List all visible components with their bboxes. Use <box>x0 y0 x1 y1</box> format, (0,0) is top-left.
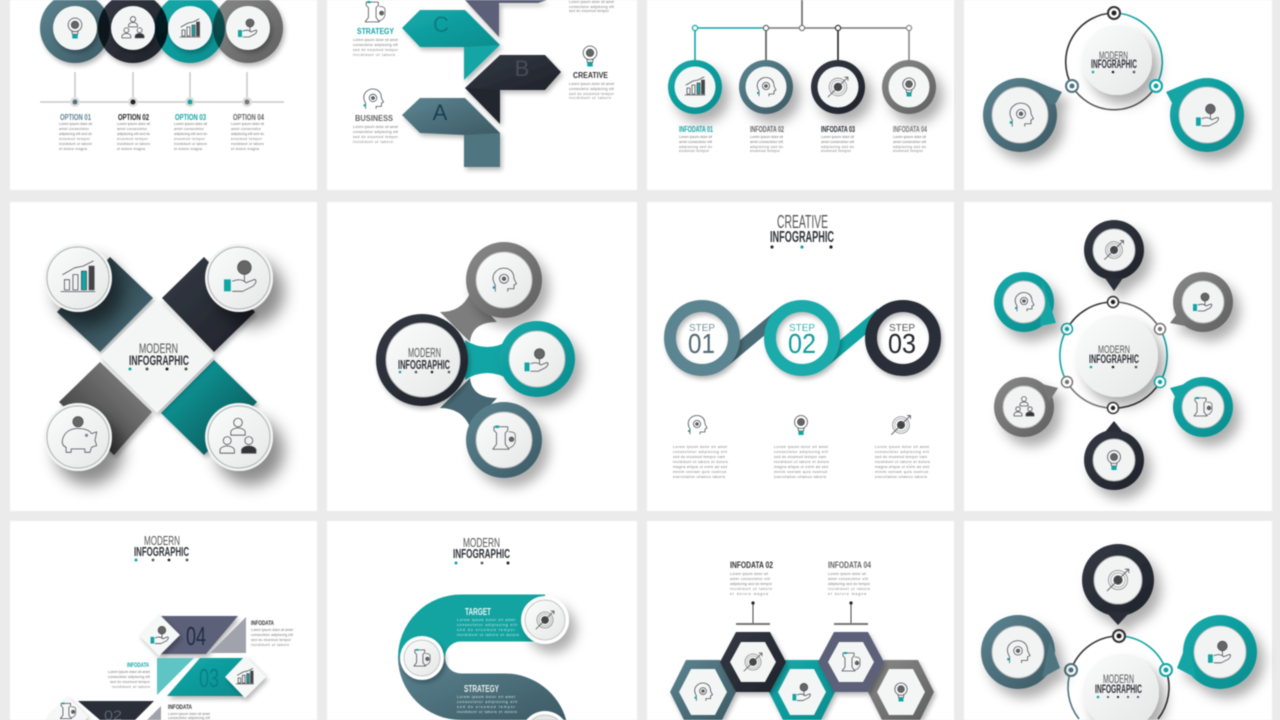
step 03 ring <box>822 306 935 370</box>
hub ring <box>1060 302 1167 408</box>
infodata descriptions: Lorem ipsum dolor sit <box>750 135 783 139</box>
hub title: MODERN <box>1103 672 1134 686</box>
panel: hub with two bubbles <box>964 0 1272 190</box>
steps title <box>770 212 834 246</box>
infodata descriptions: adipiscing sed do <box>750 145 783 149</box>
step 03 text: INFODATA <box>127 663 149 669</box>
bubble: top target <box>1082 544 1154 625</box>
arrow D <box>465 0 547 37</box>
bubble: left slate <box>983 78 1062 152</box>
option descriptions: et dolore magna <box>59 147 87 151</box>
infodata 04 text: incididunt ut labore <box>828 587 870 591</box>
target text: consectetur adipiscing elit <box>457 623 517 627</box>
option descriptions: et dolore magna <box>231 147 259 151</box>
tree connectors <box>695 0 909 60</box>
infodata labels: INFODATA 04 <box>893 125 927 134</box>
arrow A: A <box>433 100 448 125</box>
infodata descriptions: eiusmod tempor <box>821 149 852 153</box>
panel: hub with three bubbles <box>964 521 1272 720</box>
infodata descriptions: adipiscing sed do <box>821 145 854 149</box>
step 04 text: incididunt ut labore <box>251 643 289 647</box>
title <box>453 535 510 561</box>
top text: consectetur adipiscing elit <box>569 5 614 9</box>
panel: X diagram <box>10 202 317 511</box>
hub title <box>1089 344 1139 366</box>
step 02 text: minim veniam quis nostrud <box>774 470 827 474</box>
step 03 text: incididunt ut labore et dolore <box>875 460 930 464</box>
hub title dots <box>1097 696 1139 698</box>
strategy text: consectetur adipiscing elit <box>353 43 398 47</box>
hub ring <box>1068 636 1169 719</box>
option labels <box>60 113 264 122</box>
step 02 <box>47 696 161 720</box>
infodata labels: INFODATA 01 <box>679 125 713 134</box>
bubble: upper right hand <box>1170 272 1233 332</box>
steps title: CREATIVE <box>777 212 828 232</box>
infodata labels: INFODATA 03 <box>821 125 855 134</box>
hub disc <box>1076 315 1158 397</box>
infodata descriptions <box>679 135 926 153</box>
hub title dots <box>1090 366 1137 368</box>
step 04 text: Lorem ipsum dolor sit amet <box>251 628 293 632</box>
target label: TARGET <box>465 607 491 618</box>
infodata 04 label: INFODATA 04 <box>828 560 872 571</box>
arrow A <box>402 98 500 167</box>
bubble: right teal <box>1166 78 1244 152</box>
step 01 text: sed do eiusmod tempor nam <box>673 455 725 459</box>
business text <box>353 125 399 144</box>
option descriptions: Lorem ipsum dolor sit <box>59 122 92 126</box>
step 03 text: sed do eiusmod tempor nam <box>875 455 927 459</box>
hub title <box>1091 50 1137 71</box>
step 04 text: INFODATA <box>251 621 275 627</box>
option descriptions: amet consectetur <box>59 127 90 131</box>
infodata 04 text: amet consectetur elit <box>828 577 868 581</box>
title dots <box>454 562 510 564</box>
option labels: OPTION 03 <box>175 113 206 122</box>
ring nodes <box>1066 7 1162 92</box>
main title: INFOGRAPHIC <box>398 357 450 372</box>
option descriptions: adipiscing elit sed do <box>117 132 150 136</box>
option descriptions: eiusmod tempor <box>174 137 206 141</box>
infodata descriptions: adipiscing sed do <box>679 145 712 149</box>
bubble: lower left people <box>994 377 1058 437</box>
hub title: INFOGRAPHIC <box>1091 57 1137 71</box>
target text: Lorem ipsum dolor sit amet <box>457 618 515 622</box>
infodata descriptions: adipiscing sed do <box>893 145 926 149</box>
step 02 label: 02 <box>788 328 816 359</box>
hexagon dark <box>720 632 786 692</box>
step 03 text: Lorem ipsum dolor sit amet <box>108 670 150 674</box>
icon: business head <box>364 89 384 108</box>
option labels: OPTION 04 <box>233 113 264 122</box>
option descriptions: eiusmod tempor <box>231 137 263 141</box>
step 02 ring <box>770 306 834 370</box>
centre diamond <box>100 300 214 413</box>
infodata descriptions: eiusmod tempor <box>750 149 781 153</box>
infodata 04 text: et dolore magna <box>828 592 866 596</box>
disc: target <box>521 596 569 644</box>
creative label: CREATIVE <box>573 71 609 80</box>
infodata 04 text: Lorem ipsum dolor sit <box>828 572 866 576</box>
option descriptions: et dolore magna <box>117 147 145 151</box>
hub title: INFOGRAPHIC <box>1095 682 1142 696</box>
target text: sed do eiusmod tempor <box>457 628 516 632</box>
creative text: consectetur adipiscing elit <box>569 87 614 91</box>
option descriptions: Lorem ipsum dolor sit <box>231 122 264 126</box>
panel: folded arrows <box>327 0 637 190</box>
option descriptions: eiusmod tempor <box>59 137 91 141</box>
hub disc <box>1083 654 1159 720</box>
bubble: lower right tower <box>1170 377 1233 437</box>
pin 04 <box>834 601 868 624</box>
connectors <box>440 293 510 427</box>
business text: consectetur adipiscing elit <box>353 130 398 134</box>
hexagon gray <box>868 660 934 720</box>
step icons <box>688 416 910 435</box>
option discs <box>53 6 270 50</box>
step 04 text <box>251 621 293 647</box>
strategy text: sed do eiusmod tempor <box>457 705 516 709</box>
infodata 04 text: adipiscing sed do tempor <box>828 582 871 586</box>
title: INFOGRAPHIC <box>134 545 189 559</box>
hub title dots <box>1092 71 1135 73</box>
infodata descriptions: Lorem ipsum dolor sit <box>679 135 712 139</box>
step 01 text <box>673 445 728 479</box>
option descriptions <box>59 122 264 151</box>
panel: hexagon chain <box>647 521 954 720</box>
panel: S path <box>327 521 637 720</box>
satellite icons <box>493 268 548 449</box>
business text: sed do eiusmod tempor <box>353 135 399 139</box>
strategy text <box>457 695 517 714</box>
step 03 text <box>108 663 151 689</box>
option descriptions: incididunt ut labore <box>117 142 150 146</box>
arrow B: B <box>515 56 529 81</box>
step 02 text: sed do eiusmod tempor nam <box>774 455 826 459</box>
step 03 text: sed do eiusmod tempor <box>110 680 151 684</box>
steps title: INFOGRAPHIC <box>770 229 834 246</box>
option descriptions: et dolore magna <box>174 147 202 151</box>
strategy text: Lorem ipsum dolor sit amet <box>353 38 398 42</box>
step 01 label: STEP <box>689 322 715 334</box>
step 01 text: magna aliqua ut enim ad sed <box>673 465 727 469</box>
step 04 text: consectetur adipiscing elit <box>251 633 293 637</box>
hexagon teal <box>769 660 835 720</box>
strategy text: incididunt ut labore <box>353 53 395 57</box>
infodata descriptions: eiusmod tempor <box>893 149 924 153</box>
ring nodes <box>1065 630 1172 676</box>
infodata 02 text: incididunt ut labore <box>730 587 772 591</box>
step 03 text <box>875 445 930 479</box>
title: MODERN <box>144 533 180 548</box>
X title <box>129 340 189 368</box>
bubble: top target <box>1084 220 1144 291</box>
option descriptions: adipiscing elit sed do <box>174 132 207 136</box>
arrow B <box>465 55 561 124</box>
hub disc <box>1082 25 1152 95</box>
option descriptions: adipiscing elit sed do <box>59 132 92 136</box>
ring node centres <box>1065 300 1162 410</box>
step 02 label: STEP <box>789 322 815 334</box>
main title <box>398 346 450 372</box>
bubble: upper left head <box>994 272 1056 332</box>
step 03 text: consectetur adipiscing elit <box>875 450 929 454</box>
option descriptions: adipiscing elit sed do <box>231 132 264 136</box>
step 02 text: incididunt ut labore et dolore <box>774 460 829 464</box>
infodata 02 text: adipiscing sed do tempor <box>730 582 773 586</box>
option labels: OPTION 01 <box>60 113 91 122</box>
strategy text: sed do eiusmod tempor <box>353 48 399 52</box>
X title: MODERN <box>139 340 178 356</box>
step 03 text: incididunt ut labore <box>112 685 150 689</box>
panel: three steps <box>647 202 954 511</box>
infodata 02 text: amet consectetur elit <box>730 577 770 581</box>
step 01 text: consectetur adipiscing elit <box>673 450 727 454</box>
option icons <box>68 17 257 38</box>
creative text: sed do eiusmod tempor <box>569 92 615 96</box>
S lower band <box>398 658 566 720</box>
step 01 text: exercitation ullamco laboris <box>673 475 725 479</box>
infodata descriptions: amet consectetur elit <box>893 140 926 144</box>
title: MODERN <box>463 535 500 550</box>
infodata descriptions: amet consectetur elit <box>750 140 783 144</box>
option descriptions: amet consectetur <box>117 127 148 131</box>
step 04: 04 <box>186 621 206 651</box>
tree icons <box>685 77 915 97</box>
hub title <box>1095 672 1142 696</box>
step 01 text: incididunt ut labore et dolore <box>673 460 728 464</box>
step 01 ring <box>670 306 782 370</box>
step 03 label: 03 <box>888 328 916 359</box>
pin 02 <box>736 601 770 624</box>
panel: diagonal steps <box>10 521 317 720</box>
option descriptions: incididunt ut labore <box>59 142 92 146</box>
S upper band <box>422 618 545 658</box>
title <box>134 533 189 559</box>
step 02 text: consectetur adipiscing elit <box>774 450 828 454</box>
overlapping option rings <box>40 0 283 63</box>
hexagon purple slate <box>818 632 884 692</box>
step 03 label: STEP <box>889 322 915 334</box>
step 03 <box>157 656 266 698</box>
step 03 text: consectetur adipiscing elit <box>108 675 150 679</box>
step 03 text: exercitation ullamco laboris <box>875 475 927 479</box>
infodata 02 label: INFODATA 02 <box>730 560 773 571</box>
icon: creative bulb <box>583 46 597 66</box>
title dots <box>134 558 188 562</box>
tree nodes <box>692 25 912 31</box>
target text: incididunt ut labore et dolore <box>457 633 519 637</box>
business text: Lorem ipsum dolor sit amet <box>353 125 398 129</box>
hub title: MODERN <box>1099 50 1128 62</box>
step 02 text <box>774 445 829 479</box>
step 01 label: 01 <box>688 328 715 359</box>
step 02 text <box>168 705 210 720</box>
strategy text: incididunt ut labore et dolore <box>457 710 517 714</box>
infodata labels <box>679 125 927 134</box>
strategy text: Lorem ipsum dolor sit amet <box>457 695 515 699</box>
top text <box>569 0 614 13</box>
target text <box>457 618 519 637</box>
main title: MODERN <box>408 346 441 360</box>
main title dots <box>399 371 450 373</box>
infodata 04 text <box>828 572 871 596</box>
timeline axis <box>40 72 284 102</box>
strategy label: STRATEGY <box>464 684 499 695</box>
infodata descriptions: Lorem ipsum dolor sit <box>893 135 926 139</box>
bubble: right hand <box>1177 615 1257 689</box>
top text: sed do eiusmod tempor <box>569 9 610 13</box>
timeline nodes <box>70 97 252 107</box>
step 02 text: consectetur adipiscing elit <box>168 716 210 720</box>
step 03 text: minim veniam quis nostrud <box>875 470 928 474</box>
infodata descriptions: Lorem ipsum dolor sit <box>821 135 854 139</box>
strategy text: consectetur adipiscing elit <box>457 700 517 704</box>
top text: Lorem ipsum dolor sit amet <box>569 0 614 4</box>
infodata labels: INFODATA 02 <box>750 125 784 134</box>
infodata descriptions: amet consectetur elit <box>679 140 712 144</box>
X icons <box>61 261 256 453</box>
step 01 text: minim veniam quis nostrud <box>673 470 726 474</box>
step 04 text: sed do eiusmod tempor <box>251 638 292 642</box>
business label: BUSINESS <box>355 114 394 123</box>
option descriptions: Lorem ipsum dolor sit <box>174 122 207 126</box>
X title: INFOGRAPHIC <box>129 352 189 368</box>
panel: six bubble hub <box>964 202 1272 511</box>
infodata descriptions: amet consectetur elit <box>821 140 854 144</box>
option descriptions: amet consectetur <box>231 127 262 131</box>
panel: option timeline <box>10 0 317 190</box>
infodata descriptions: eiusmod tempor <box>679 149 710 153</box>
option descriptions: eiusmod tempor <box>117 137 149 141</box>
tree circles <box>668 60 936 114</box>
bubble: bottom bulb <box>1084 421 1144 490</box>
step 02 text: Lorem ipsum dolor sit amet <box>168 712 210 716</box>
X discs <box>44 244 273 471</box>
strategy label: STRATEGY <box>357 27 395 36</box>
satellite circles <box>466 242 575 478</box>
strategy text <box>353 38 399 57</box>
step 02 text: exercitation ullamco laboris <box>774 475 826 479</box>
creative text <box>569 82 615 100</box>
infodata 02 text <box>730 572 773 596</box>
steps title dots <box>770 245 833 249</box>
hub ring <box>1066 13 1162 110</box>
title: INFOGRAPHIC <box>453 546 510 561</box>
bubble: left head <box>981 615 1060 689</box>
hub title: INFOGRAPHIC <box>1089 352 1139 366</box>
step 02 text: INFODATA <box>168 705 193 711</box>
step 02 text: Lorem ipsum dolor sit amet <box>774 445 828 449</box>
disc: lower clipped <box>526 711 564 720</box>
disc: tower <box>400 636 444 680</box>
creative text: Lorem ipsum dolor sit amet <box>569 82 614 86</box>
hexagon slate <box>670 660 736 720</box>
step 04 <box>139 614 246 656</box>
option descriptions: Lorem ipsum dolor sit <box>117 122 150 126</box>
option descriptions: amet consectetur <box>174 127 205 131</box>
business text: incididunt ut labore <box>353 140 393 144</box>
X title dots <box>128 368 188 370</box>
panel: metaball hub <box>327 202 637 511</box>
option descriptions: incididunt ut labore <box>231 142 264 146</box>
arrow C: C <box>433 12 449 37</box>
option labels: OPTION 02 <box>118 113 149 122</box>
ring nodes <box>1062 296 1166 414</box>
creative text: incididunt ut labore <box>569 96 611 100</box>
arrow C <box>402 10 500 80</box>
option descriptions: incididunt ut labore <box>174 142 207 146</box>
infodata 02 text: Lorem ipsum dolor sit <box>730 572 768 576</box>
panel: org tree <box>647 0 954 190</box>
infodata 02 text: et dolore magna <box>730 592 768 596</box>
hub title: MODERN <box>1098 344 1130 356</box>
step 01 text: Lorem ipsum dolor sit amet <box>673 445 727 449</box>
icon: strategy tower <box>365 1 385 22</box>
step 03 text: Lorem ipsum dolor sit amet <box>875 445 929 449</box>
main circle <box>376 314 468 406</box>
step 03 text: magna aliqua ut enim ad sed <box>875 465 929 469</box>
X arms <box>57 257 257 455</box>
step 03: 03 <box>199 663 219 693</box>
step 02 text: magna aliqua ut enim ad sed <box>774 465 828 469</box>
